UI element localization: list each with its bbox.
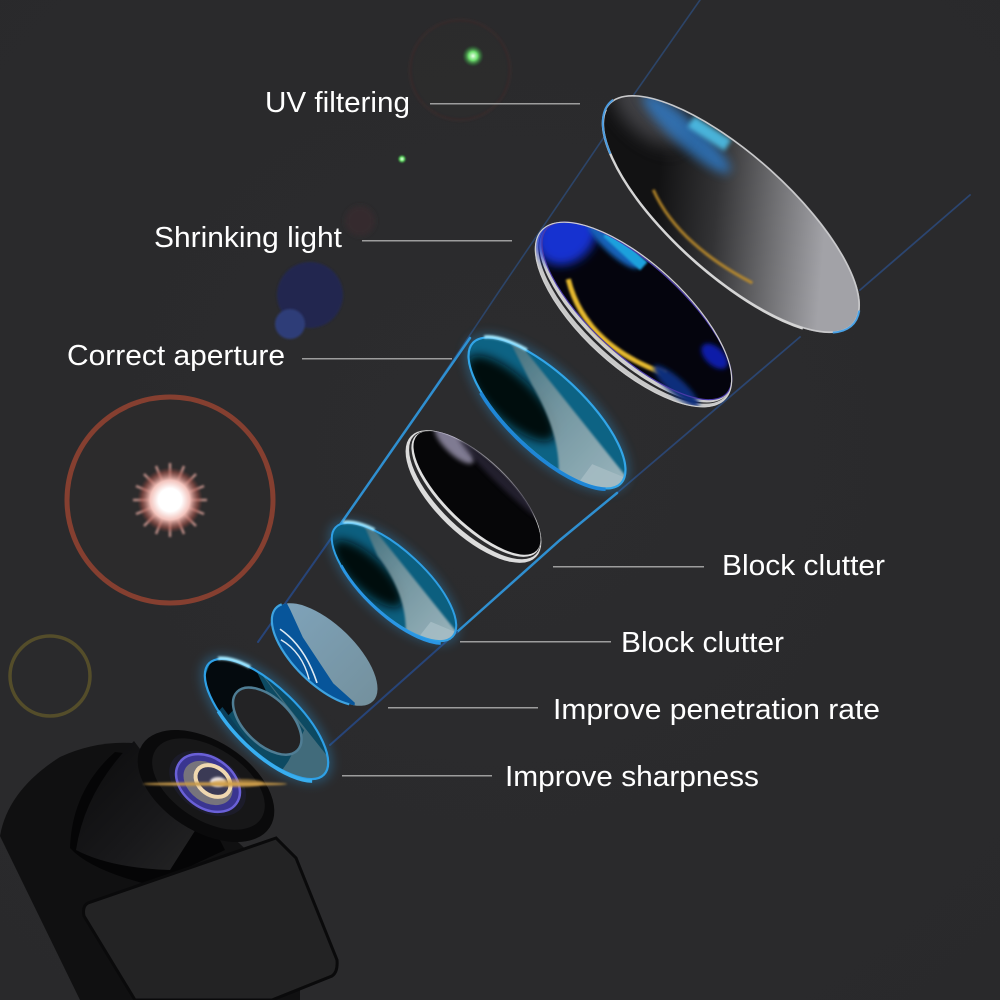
camera glass bbox=[165, 742, 251, 824]
label: Improve sharpness: Improve sharpness bbox=[505, 761, 759, 793]
lens 4: block clutter (upper) bbox=[406, 430, 542, 563]
lens 1: UV filter bbox=[602, 94, 860, 334]
lens 6: improve penetration rate bbox=[270, 603, 378, 706]
camera body bbox=[0, 743, 300, 1000]
lens 7: improve sharpness bbox=[196, 650, 338, 788]
camera mounting plate bbox=[84, 838, 337, 1000]
lens 7 centre hole bbox=[221, 675, 313, 767]
label: Shrinking light: Shrinking light bbox=[154, 222, 342, 254]
lens flare: small green dot bbox=[397, 154, 407, 164]
label: Block clutter (upper): Block clutter bbox=[722, 550, 885, 582]
label: Block clutter (lower): Block clutter bbox=[621, 627, 784, 659]
camera lens head bbox=[118, 707, 294, 865]
label: Improve penetration rate: Improve penetration rate bbox=[553, 694, 880, 726]
camera neck bbox=[76, 741, 198, 870]
camera glare bbox=[143, 779, 287, 787]
light cone: upper edge bbox=[258, 0, 700, 642]
lens flare: blue circles bbox=[275, 262, 343, 339]
lens 3: correct aperture bbox=[460, 328, 634, 498]
camera socket bbox=[70, 752, 225, 885]
lens 5: block clutter (lower) bbox=[324, 515, 464, 649]
lens 2: shrinking light bbox=[534, 221, 732, 408]
label: UV filtering: UV filtering bbox=[265, 87, 410, 119]
camera bbox=[0, 707, 337, 1000]
light cone: lower edge bbox=[330, 195, 970, 745]
lens flare: red ring with star burst bbox=[67, 397, 273, 603]
lens flare: yellow ring bbox=[10, 636, 90, 716]
lens flare: faint red ring with green dot bbox=[410, 20, 510, 120]
label: Correct aperture: Correct aperture bbox=[67, 340, 285, 372]
lens flare: faint red spot bbox=[345, 206, 375, 236]
